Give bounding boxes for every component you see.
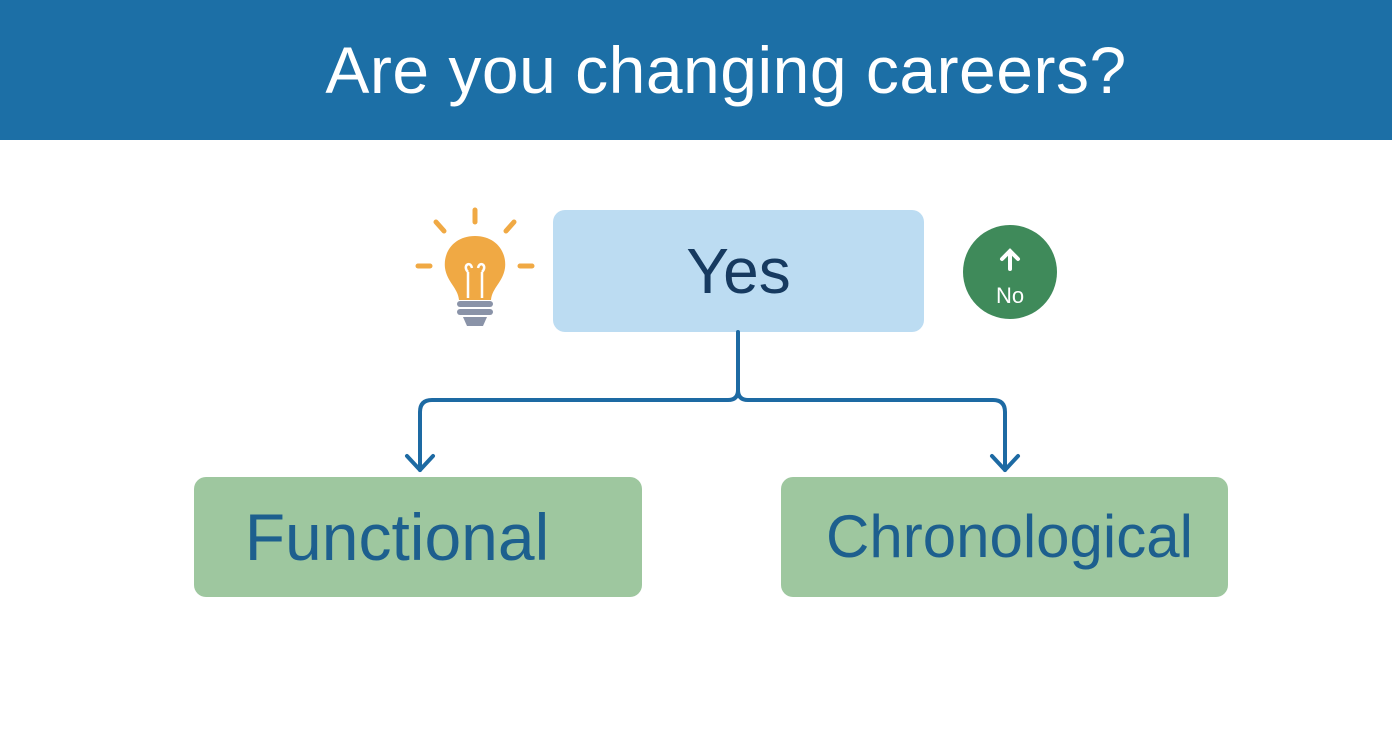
box: Chronological (781, 477, 1228, 597)
header bar (0, 0, 1392, 140)
icon: light bulb (416, 208, 534, 326)
icon: No circle (963, 225, 1057, 319)
box: Yes: Yes (686, 235, 791, 307)
box: Yes (553, 210, 924, 332)
box: Functional: Functional (245, 500, 549, 574)
title: Are you changing careers? (325, 33, 1127, 107)
box: Functional (194, 477, 642, 597)
icon: No circle: No (996, 283, 1024, 308)
box: Chronological: Chronological (826, 503, 1193, 570)
